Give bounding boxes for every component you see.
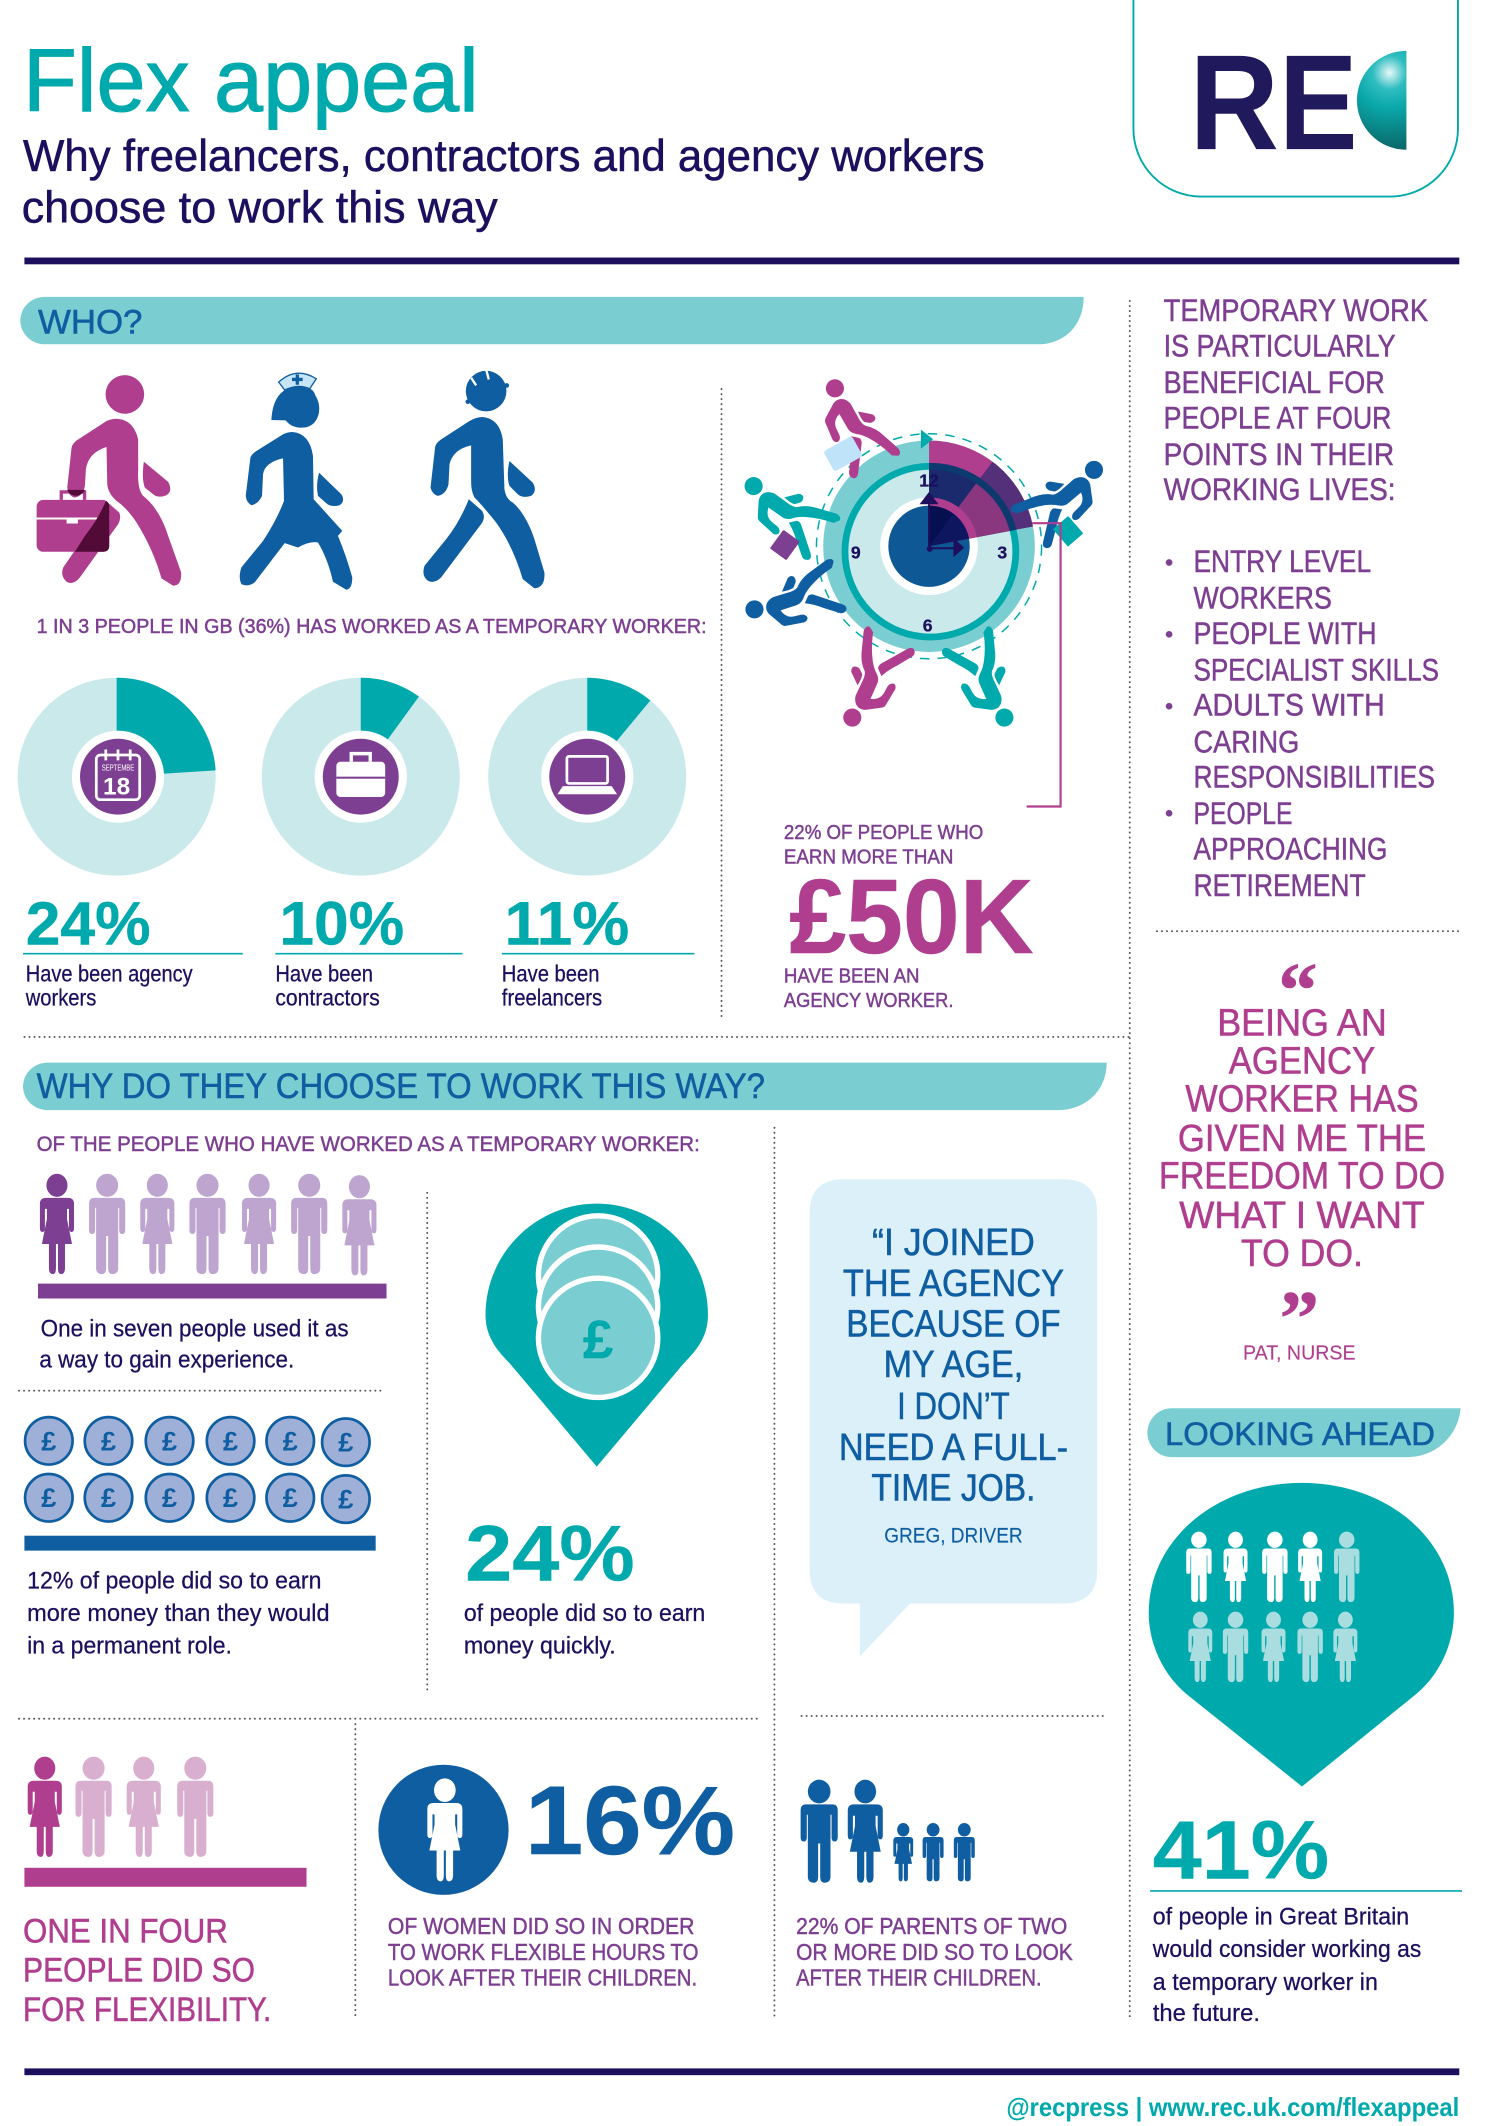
speech bubble: greg, driver: TIME JOB. bbox=[871, 1467, 1035, 1509]
quote: pat, nurse: WHAT I WANT bbox=[1179, 1195, 1425, 1237]
icon: woman in circle bbox=[378, 1765, 509, 1895]
list: four working life points: ENTRY LEVEL bbox=[1193, 544, 1371, 579]
pie chart: 24% agency bbox=[18, 678, 216, 876]
stat: 10% contractors bbox=[275, 890, 462, 1011]
footer link: @recpress | www.rec.uk.com/flexappeal bbox=[1006, 2094, 1459, 2122]
icon: walker pink top bbox=[795, 368, 901, 487]
speech bubble: greg, driver: I DON’T bbox=[897, 1386, 1010, 1428]
pictogram: twelve coins bbox=[25, 1417, 370, 1523]
text: parents: 22% OF PARENTS OF TWO bbox=[796, 1913, 1067, 1939]
text: parents bbox=[796, 1913, 1073, 1991]
text: temporary work intro: PEOPLE AT FOUR bbox=[1164, 400, 1392, 435]
text: 12% more money: in a permanent role. bbox=[27, 1633, 232, 1660]
stat: 10% contractors: 10% bbox=[279, 890, 404, 958]
quote: pat, nurse: PAT, NURSE bbox=[1243, 1343, 1356, 1365]
heading: why do they choose bbox=[23, 1063, 1107, 1110]
text: one in four: FOR FLEXIBILITY. bbox=[23, 1991, 271, 2029]
list: four working life points: SPECIALIST SKILLS bbox=[1193, 652, 1439, 687]
text: 12% more money: 12% of people did so to earn bbox=[27, 1568, 321, 1595]
stat: 22% earn more than 50K: £50K bbox=[789, 858, 1033, 976]
icon: walker teal left bbox=[722, 459, 842, 572]
stat: 22% earn more than 50K bbox=[784, 822, 1033, 1012]
icon: nurse bbox=[240, 373, 352, 590]
pictogram: twelve coins: £ bbox=[283, 1425, 298, 1456]
list: four working life points bbox=[1166, 544, 1439, 903]
logo panel bbox=[1133, 0, 1458, 197]
pictogram: twelve coins: £ bbox=[338, 1484, 353, 1515]
list: four working life points: WORKERS bbox=[1193, 581, 1332, 616]
title: Flex appeal bbox=[23, 30, 479, 130]
quote: pat, nurse: “ bbox=[1278, 948, 1318, 1035]
text: women flexible hours: TO WORK FLEXIBLE HOURS TO bbox=[388, 1939, 698, 1965]
list: four working life points: CARING bbox=[1193, 724, 1299, 759]
icon: walker teal bottom right bbox=[940, 625, 1032, 738]
wedge: 22 percent bbox=[929, 440, 1033, 546]
text: one in seven: One in seven people used it as bbox=[41, 1315, 349, 1342]
stat: 11% freelancers: freelancers bbox=[502, 985, 602, 1011]
icon: pin with ten people bbox=[1149, 1483, 1454, 1786]
pie chart: 10% contractors bbox=[262, 678, 460, 876]
text: one in four bbox=[23, 1912, 271, 2029]
stat: 11% freelancers: 11% bbox=[505, 890, 629, 958]
icon: pin with coins bbox=[486, 1204, 708, 1467]
text: 12% more money bbox=[27, 1568, 330, 1660]
list: four working life points: ADULTS WITH bbox=[1193, 688, 1385, 723]
stat: 41% looking ahead: the future. bbox=[1153, 2001, 1260, 2027]
pictogram: twelve coins: £ bbox=[338, 1427, 353, 1458]
logo panel: R bbox=[1189, 26, 1279, 178]
quote: pat, nurse: ” bbox=[1280, 1276, 1319, 1363]
clock chart with 22% wedge: 3 bbox=[997, 542, 1007, 562]
quote: pat, nurse: WORKER HAS bbox=[1185, 1078, 1419, 1120]
stat: 22% earn more than 50K: 22% OF PEOPLE WHO bbox=[784, 822, 983, 844]
logo panel: E bbox=[1279, 26, 1358, 178]
bar: purple bbox=[38, 1284, 387, 1299]
text: temporary work intro: BENEFICIAL FOR bbox=[1164, 365, 1385, 400]
stat: 24% money quickly: of people did so to earn bbox=[464, 1600, 705, 1627]
text: parents: OR MORE DID SO TO LOOK bbox=[796, 1939, 1073, 1965]
pictogram: family bbox=[801, 1780, 975, 1883]
text: one in four: PEOPLE DID SO bbox=[23, 1952, 255, 1990]
text: parents: AFTER THEIR CHILDREN. bbox=[796, 1965, 1042, 1991]
quote: pat, nurse bbox=[1159, 948, 1445, 1364]
speech bubble: greg, driver: BECAUSE OF bbox=[846, 1303, 1061, 1345]
speech bubble: greg, driver: “I JOINED bbox=[872, 1222, 1035, 1264]
icon: man with briefcase bbox=[37, 375, 181, 586]
list: four working life points: APPROACHING bbox=[1193, 831, 1387, 866]
stat: 24% agency workers: workers bbox=[25, 985, 96, 1011]
pictogram: twelve coins: £ bbox=[41, 1482, 56, 1513]
pictogram: twelve coins: £ bbox=[162, 1482, 177, 1513]
text: temporary work intro: WORKING LIVES: bbox=[1164, 472, 1396, 507]
quote: pat, nurse: AGENCY bbox=[1229, 1041, 1375, 1083]
stat: 11% freelancers: Have been bbox=[502, 960, 599, 986]
icon: briefcase bbox=[336, 754, 385, 797]
subtitle bbox=[22, 131, 985, 232]
icon: builder bbox=[423, 369, 544, 588]
stat: 24% money quickly: 24% bbox=[465, 1509, 635, 1597]
text: temporary work intro: POINTS IN THEIR bbox=[1164, 437, 1394, 472]
speech bubble: greg, driver: MY AGE, bbox=[884, 1344, 1023, 1386]
pictogram: twelve coins: £ bbox=[223, 1482, 238, 1513]
subtitle: Why freelancers, contractors and agency workers bbox=[23, 131, 985, 181]
clock chart with 22% wedge bbox=[816, 430, 1042, 660]
footer rule bbox=[24, 2068, 1459, 2075]
speech bubble: greg, driver: NEED A FULL- bbox=[839, 1427, 1068, 1469]
text: of the people caption: OF THE PEOPLE WHO HAVE WORKED AS A TEMPORARY WORKER: bbox=[37, 1131, 700, 1156]
clock chart with 22% wedge: 12 bbox=[919, 471, 939, 491]
stat: 41% looking ahead: of people in Great Britain bbox=[1153, 1905, 1409, 1931]
icon: walker blue lower left bbox=[738, 558, 849, 640]
stat: 22% earn more than 50K: AGENCY WORKER. bbox=[784, 990, 953, 1012]
icon: calendar: 18 bbox=[103, 773, 130, 800]
list: four working life points: PEOPLE WITH bbox=[1193, 616, 1377, 651]
people row one bbox=[1186, 1532, 1359, 1602]
stat: 10% contractors: Have been bbox=[275, 960, 373, 986]
stat: 41% looking ahead: would consider working as bbox=[1152, 1937, 1421, 1963]
text: temporary work intro bbox=[1164, 293, 1428, 507]
icon: walker blue right bbox=[1009, 444, 1128, 560]
pictogram: twelve coins: £ bbox=[101, 1482, 116, 1513]
stat: 41% looking ahead: a temporary worker in bbox=[1153, 1970, 1378, 1996]
subtitle: choose to work this way bbox=[22, 182, 498, 232]
people row two bbox=[1188, 1612, 1357, 1682]
icon: laptop bbox=[557, 756, 617, 794]
list: four working life points: RETIREMENT bbox=[1193, 868, 1366, 903]
pie chart: 11% freelancers bbox=[488, 678, 686, 876]
icon: walker pink bottom bbox=[825, 625, 917, 738]
clock chart with 22% wedge: 9 bbox=[851, 542, 861, 562]
text: one in seven bbox=[39, 1315, 349, 1374]
bar: magenta bbox=[24, 1868, 307, 1887]
pictogram: twelve coins: £ bbox=[101, 1425, 116, 1456]
pictogram: twelve coins: £ bbox=[283, 1482, 298, 1513]
pictogram: twelve coins: £ bbox=[223, 1425, 238, 1456]
pictogram: twelve coins: £ bbox=[41, 1425, 56, 1456]
stat: 41% looking ahead bbox=[1150, 1804, 1462, 2027]
pictogram: one in four bbox=[28, 1757, 213, 1857]
heading: looking ahead: LOOKING AHEAD bbox=[1165, 1416, 1435, 1452]
stat: 24% agency workers bbox=[23, 890, 243, 1011]
pictogram: twelve coins: £ bbox=[162, 1425, 177, 1456]
quote: pat, nurse: TO DO. bbox=[1241, 1233, 1363, 1275]
heading: who: WHO? bbox=[38, 303, 142, 341]
clock chart with 22% wedge: 6 bbox=[923, 616, 933, 636]
icon: calendar bbox=[96, 750, 140, 800]
speech bubble: greg, driver: GREG, DRIVER bbox=[884, 1524, 1023, 1547]
stat: 22% earn more than 50K: EARN MORE THAN bbox=[784, 846, 953, 868]
stat: 11% freelancers bbox=[502, 890, 694, 1011]
stat: 41% looking ahead: 41% bbox=[1153, 1804, 1329, 1897]
icon: pin with coins: £ bbox=[583, 1310, 613, 1370]
header rule bbox=[24, 258, 1459, 264]
icon: calendar: SEPTEMBE bbox=[102, 764, 135, 773]
text: 12% more money: more money than they would bbox=[27, 1600, 330, 1627]
text: one in four: ONE IN FOUR bbox=[23, 1912, 228, 1950]
stat: 24% money quickly: money quickly. bbox=[464, 1633, 616, 1660]
text: one in seven: a way to gain experience. bbox=[39, 1347, 294, 1374]
bar: blue bbox=[24, 1536, 376, 1551]
stat: 16%: 16% bbox=[525, 1766, 735, 1875]
list: four working life points: RESPONSIBILITIES bbox=[1193, 760, 1435, 795]
quote: pat, nurse: FREEDOM TO DO bbox=[1159, 1156, 1445, 1198]
heading: who bbox=[20, 297, 1084, 344]
text: temporary work intro: TEMPORARY WORK bbox=[1164, 293, 1428, 328]
heading: why do they choose: WHY DO THEY CHOOSE TO WORK THIS WAY? bbox=[37, 1067, 765, 1106]
text: temporary work intro: IS PARTICULARLY bbox=[1164, 328, 1396, 363]
leader line bbox=[1027, 523, 1061, 806]
text: women flexible hours: OF WOMEN DID SO IN ORDER bbox=[388, 1913, 694, 1939]
pictogram: one in seven bbox=[40, 1174, 376, 1275]
stat: 10% contractors: contractors bbox=[275, 985, 380, 1011]
text: women flexible hours: LOOK AFTER THEIR CHILDREN. bbox=[388, 1965, 697, 1991]
quote: pat, nurse: BEING AN bbox=[1217, 1003, 1387, 1045]
quote: pat, nurse: GIVEN ME THE bbox=[1178, 1118, 1426, 1160]
list: four working life points: PEOPLE bbox=[1193, 796, 1292, 831]
speech bubble: greg, driver: THE AGENCY bbox=[843, 1263, 1064, 1305]
stat: 22% earn more than 50K: HAVE BEEN AN bbox=[784, 966, 920, 988]
stat: 24% agency workers: Have been agency bbox=[26, 960, 193, 986]
stat: 24% agency workers: 24% bbox=[26, 890, 151, 958]
stat: 24% money quickly bbox=[464, 1509, 705, 1660]
speech bubble: greg, driver bbox=[810, 1179, 1097, 1656]
text: women flexible hours bbox=[388, 1913, 698, 1991]
text: temporary worker caption: 1 IN 3 PEOPLE IN GB (36%) HAS WORKED AS A TEMPORARY WORKER: bbox=[37, 616, 707, 638]
heading: looking ahead bbox=[1147, 1408, 1461, 1457]
